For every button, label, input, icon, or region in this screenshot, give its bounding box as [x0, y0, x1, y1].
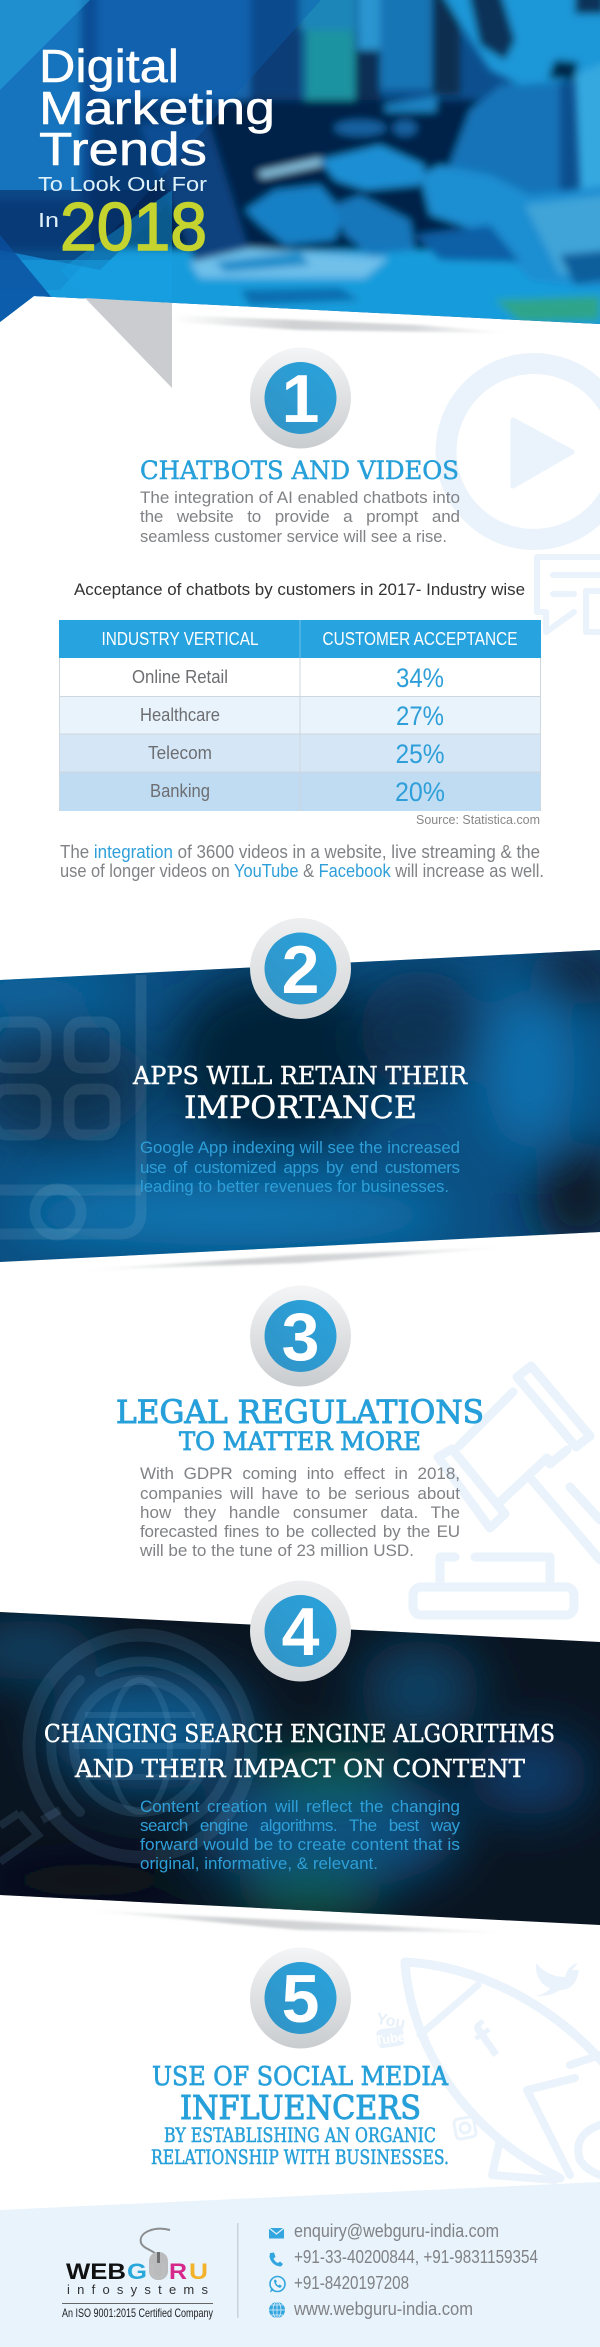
table: customer acceptance: INDUSTRY VERTICAL [102, 629, 258, 649]
table: customer acceptance: 25% [396, 739, 444, 769]
text: search paragraph: forward would be to create content that is [140, 1835, 460, 1854]
text: video paragraph [60, 842, 544, 881]
text: chatbots paragraph: the website to provide a prompt and [140, 507, 460, 526]
hero photo banner [0, 0, 600, 335]
footer divider [237, 2223, 238, 2318]
badge 5 [250, 1948, 351, 2048]
table: customer acceptance: Banking [150, 781, 210, 801]
heading: apps will retain: IMPORTANCE [184, 1090, 417, 1126]
text: search paragraph: original, informative, & relevant. [140, 1854, 378, 1873]
text: chatbots paragraph: seamless customer service will see a rise. [140, 527, 447, 546]
icon: background rocket with social logos [374, 1962, 600, 2180]
text: video paragraph: use of longer videos on YouTube & Facebook will increase as well. [60, 861, 544, 881]
table: customer acceptance: CUSTOMER ACCEPTANCE [322, 629, 518, 649]
table: customer acceptance [59, 620, 541, 811]
heading: social media influencers: RELATIONSHIP WITH BUSINESSES. [151, 2145, 449, 2169]
icon: whatsapp [270, 2276, 285, 2292]
text: legal paragraph: forecasted fines to be collected by the EU [140, 1522, 460, 1541]
contact: email: enquiry@webguru-india.com [294, 2221, 499, 2241]
badge 4 [250, 1580, 351, 1682]
text: apps paragraph [140, 1138, 460, 1196]
photo: blurred office scene [0, 0, 600, 335]
heading: chatbots and videos: CHATBOTS AND VIDEOS [140, 456, 459, 485]
badge 3 [250, 1286, 351, 1386]
title: In [38, 210, 59, 232]
badge 4: 4 [282, 1594, 320, 1670]
woman shirt and arm [440, 75, 560, 215]
text: chatbots paragraph: The integration of AI enabled chatbots into [140, 488, 460, 507]
heading: changing search engine algorithms [44, 1720, 555, 1783]
heading: legal regulations [116, 1393, 484, 1456]
icon: mouse [141, 2229, 170, 2280]
contact: phones: +91-33-40200844, +91-9831159354 [294, 2247, 538, 2267]
table: customer acceptance: Telecom [148, 743, 212, 763]
text: search paragraph: Content creation will reflect the changing [140, 1797, 460, 1816]
icon: phone [270, 2252, 283, 2266]
text: chatbots paragraph [140, 488, 460, 546]
heading: legal regulations: TO MATTER MORE [179, 1427, 421, 1456]
heading: apps will retain: APPS WILL RETAIN THEIR [132, 1062, 468, 1090]
icon: phone with app tiles [0, 975, 141, 1235]
text: legal paragraph: how they handle consumer data. The [140, 1503, 460, 1522]
badge 5: 5 [282, 1961, 319, 2037]
title: To Look Out For [38, 174, 207, 196]
table: customer acceptance: Online Retail [132, 667, 228, 687]
title: Trends [39, 123, 207, 175]
contact: website: www.webguru-india.com [293, 2299, 473, 2319]
text: search paragraph [140, 1797, 460, 1873]
heading: social media influencers [151, 2062, 449, 2169]
logo: webguru infosystems: An ISO 9001:2015 Certified Company [62, 2306, 213, 2320]
table: customer acceptance: Healthcare [140, 705, 220, 725]
text: legal paragraph: will be to the tune of 23 million USD. [139, 1541, 414, 1560]
icon: background rocket with social logos: You [375, 2011, 407, 2032]
table caption: Acceptance of chatbots by customers in 2017- Industry wise [74, 580, 525, 599]
badge 3: 3 [282, 1299, 319, 1375]
badge 1: 1 [282, 361, 319, 437]
heading: changing search engine algorithms: CHANGING SEARCH ENGINE ALGORITHMS [44, 1720, 555, 1748]
heading: changing search engine algorithms: AND THEIR IMPACT ON CONTENT [74, 1755, 525, 1783]
logo: webguru infosystems: infosystems [67, 2282, 208, 2297]
hands [320, 145, 425, 190]
text: legal paragraph [139, 1464, 460, 1560]
icon: globe [269, 2302, 285, 2318]
title: Marketing [39, 82, 275, 134]
icon: magnifier with globe [0, 1635, 251, 1862]
table: customer acceptance: 20% [395, 777, 445, 807]
title: 2018 [60, 189, 207, 265]
panel: search algorithms section [0, 1600, 600, 1940]
heading: legal regulations: LEGAL REGULATIONS [116, 1393, 484, 1431]
text: apps paragraph: Google App indexing will see the increased [140, 1138, 460, 1157]
icon: email [269, 2228, 284, 2238]
logo: webguru infosystems: U [189, 2259, 208, 2284]
text: video paragraph: The integration of 3600 videos in a website, live streaming & the [60, 842, 540, 862]
hero shadow [172, 315, 516, 333]
geometric overlays [0, 0, 321, 290]
panel shadow [80, 1247, 516, 1270]
badge 2 [250, 918, 351, 1019]
text: search paragraph: search engine algorithms. The best way [140, 1816, 460, 1835]
text: apps paragraph: use of customized apps by end customers [140, 1158, 460, 1177]
title: Digital [39, 40, 179, 92]
folded gray ribbon under hero [85, 298, 172, 388]
heading: social media influencers: USE OF SOCIAL MEDIA [152, 2062, 449, 2092]
logo: webguru infosystems: WEB [66, 2259, 126, 2284]
table: customer acceptance: 34% [396, 663, 444, 693]
text: legal paragraph: companies will have to be serious about [140, 1484, 460, 1503]
panel shadow [80, 1910, 516, 1933]
logo: webguru infosystems [62, 2229, 213, 2320]
badge 2: 2 [282, 932, 319, 1008]
logo: webguru infosystems: U [149, 2259, 167, 2284]
contact: whatsapp number: +91-8420197208 [294, 2273, 409, 2293]
logo: webguru infosystems: R [169, 2259, 187, 2284]
panel: apps section [0, 940, 600, 1270]
laptop [140, 120, 248, 262]
icon: background rocket with social logos: Tube [374, 2029, 406, 2048]
text: legal paragraph: With GDPR coming into effect in 2018, [140, 1464, 460, 1483]
heading: apps will retain [132, 1062, 468, 1126]
source note: Source: Statistica.com [416, 812, 540, 827]
table: customer acceptance: 27% [396, 701, 444, 731]
icon: background gavel [413, 1366, 600, 1615]
panel: footer [0, 2182, 600, 2347]
badge 1 [250, 348, 351, 448]
icon: background rocket with social logos: f [463, 2012, 511, 2070]
logo: webguru infosystems: G [127, 2259, 147, 2284]
heading: social media influencers: INFLUENCERS [180, 2088, 421, 2127]
icon: background play button and chat bubble [446, 364, 600, 632]
heading: social media influencers: BY ESTABLISHING AN ORGANIC [164, 2123, 436, 2147]
text: apps paragraph: leading to better revenues for businesses. [140, 1177, 449, 1196]
title [38, 40, 275, 265]
